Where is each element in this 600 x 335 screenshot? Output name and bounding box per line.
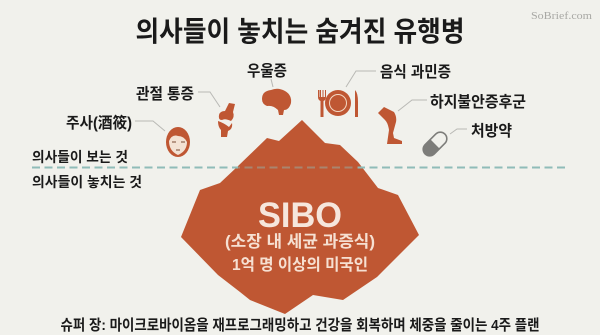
symptom: rosacea <box>66 113 190 157</box>
symptom: rosacea: 주사(酒筱) <box>66 113 132 132</box>
symptom: restless legs: 하지불안증후군 <box>430 93 526 111</box>
icon: leg <box>378 107 402 144</box>
symptom: food sensitivity <box>318 63 451 117</box>
iceberg label: SIBO <box>258 196 342 235</box>
icon: face <box>166 127 190 157</box>
icon: fork plate knife <box>318 90 358 117</box>
label: what doctors miss: 의사들이 놓치는 것 <box>32 174 142 190</box>
symptom: prescription: 처방약 <box>471 122 512 140</box>
icon: pill <box>421 130 449 158</box>
symptom: joint pain <box>136 85 235 137</box>
iceberg label: 1억 명 이상의 미국인 <box>232 256 368 274</box>
symptom: joint pain: 관절 통증 <box>136 85 194 103</box>
symptom: depression: 우울증 <box>247 62 287 80</box>
iceberg label: (소장 내 세균 과증식) <box>225 232 375 251</box>
watermark: SoBrief.com <box>531 11 592 22</box>
iceberg label <box>225 196 375 274</box>
icon: knee joint <box>218 103 235 137</box>
iceberg: SIBO <box>181 120 419 314</box>
symptom: restless legs <box>378 93 526 144</box>
symptom: prescription <box>421 122 512 158</box>
waterline divider <box>32 166 568 168</box>
title: 의사들이 놓치는 숨겨진 유행병 <box>136 16 464 47</box>
symptom: depression <box>247 62 291 115</box>
footer caption: 슈퍼 장: 마이크로바이옴을 재프로그래밍하고 건강을 회복하며 체중을 줄이는 4주 플랜 <box>60 317 540 334</box>
symptom: food sensitivity: 음식 과민증 <box>380 63 451 81</box>
icon: brain <box>262 89 291 115</box>
label: what doctors see: 의사들이 보는 것 <box>32 149 128 165</box>
